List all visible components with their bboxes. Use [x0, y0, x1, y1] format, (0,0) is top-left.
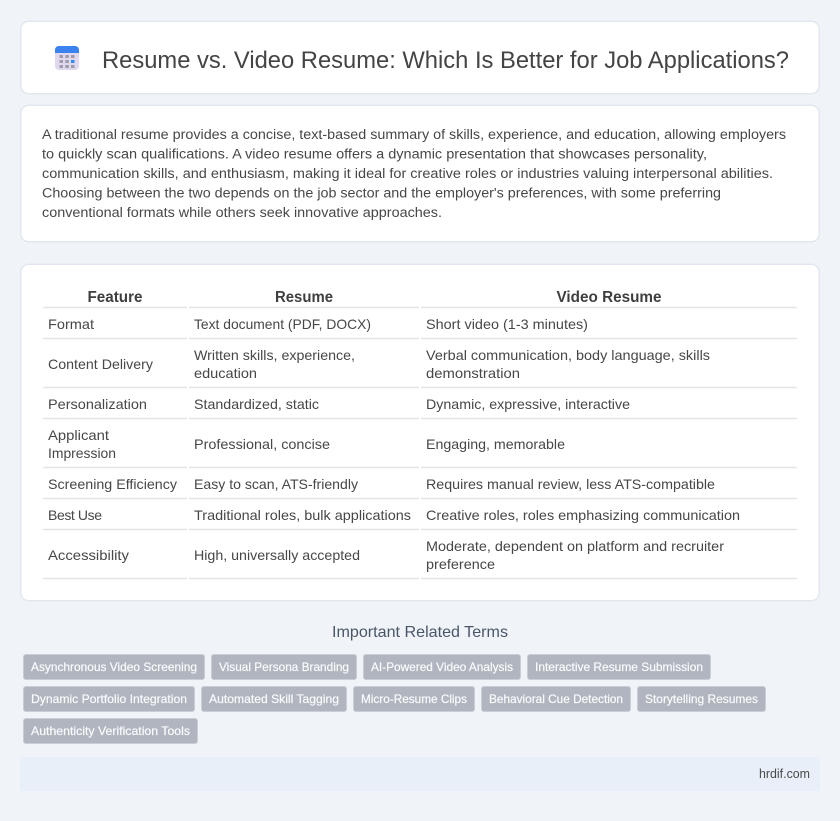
- row: personalization: Personalization: [48, 396, 147, 412]
- footer: hrdif.com: [759, 766, 810, 781]
- table header row: Resume: [275, 289, 333, 306]
- tag: [202, 686, 346, 712]
- tag: Asynchronous Video Screening: [31, 660, 197, 674]
- row: format: Format: [48, 316, 94, 332]
- row: content delivery: Content Delivery: [48, 356, 153, 372]
- text block: introduction paragraph: communication skills, and enthusiasm, making it ideal for creative roles or industries valuing interpersonal abilities.: [42, 166, 773, 182]
- row: best use: Traditional roles, bulk applications: [194, 507, 411, 523]
- row: best use: Creative roles, roles emphasizing communication: [426, 507, 740, 523]
- table header row: Feature: [88, 289, 143, 306]
- row: applicant impression: Engaging, memorable: [426, 436, 565, 452]
- tag: [24, 718, 198, 744]
- row: format: Text document (PDF, DOCX): [194, 316, 371, 332]
- panel: header: [21, 21, 819, 94]
- row: content delivery: demonstration: [426, 365, 520, 381]
- tag: [354, 686, 474, 712]
- text block: introduction paragraph: to quickly scan qualifications. A video resume offers a dynamic presentation that showcases personality,: [42, 146, 707, 162]
- row: accessibility: High, universally accepted: [194, 547, 360, 563]
- panel: introduction: [21, 105, 819, 242]
- tag: Authenticity Verification Tools: [31, 724, 190, 738]
- panel: comparison table: [21, 264, 819, 601]
- tag: Storytelling Resumes: [645, 692, 758, 706]
- row: best use: Best Use: [48, 507, 102, 523]
- row: screening efficiency: [48, 476, 715, 492]
- heading: important related terms: Important Related Terms: [332, 624, 508, 641]
- row: applicant impression: Professional, concise: [194, 436, 330, 452]
- tag: Dynamic Portfolio Integration: [31, 692, 187, 706]
- tag: [212, 654, 356, 680]
- row: screening efficiency: Requires manual review, less ATS-compatible: [426, 476, 715, 492]
- row: best use: [48, 507, 740, 523]
- row: content delivery: [48, 347, 710, 381]
- tag: Interactive Resume Submission: [535, 660, 703, 674]
- text block: introduction paragraph: conventional formats while others seek innovative approaches.: [42, 205, 442, 221]
- table header row: [88, 289, 662, 306]
- row: content delivery: education: [194, 365, 257, 381]
- table header row: Video Resume: [556, 289, 662, 306]
- tag: Behavioral Cue Detection: [489, 692, 623, 706]
- row: screening efficiency: Screening Efficiency: [48, 476, 177, 492]
- tag group: related terms: [24, 654, 766, 744]
- row: personalization: Dynamic, expressive, interactive: [426, 396, 630, 412]
- row: accessibility: Moderate, dependent on platform and recruiter: [426, 538, 724, 554]
- tag: [482, 686, 630, 712]
- row: accessibility: [48, 538, 724, 572]
- text block: introduction paragraph: A traditional resume provides a concise, text-based summary of skills, experience, and education, allowing employers: [42, 127, 786, 143]
- tag: Automated Skill Tagging: [209, 692, 339, 706]
- tag: [638, 686, 766, 712]
- footer: [20, 757, 820, 791]
- tag: [528, 654, 710, 680]
- row: applicant impression: [48, 427, 565, 461]
- row: accessibility: preference: [426, 556, 495, 572]
- row: personalization: Standardized, static: [194, 396, 319, 412]
- row: format: Short video (1-3 minutes): [426, 316, 588, 332]
- tag: [24, 686, 194, 712]
- tag: Visual Persona Branding: [219, 660, 349, 674]
- row: content delivery: Verbal communication, body language, skills: [426, 347, 710, 363]
- tag: [364, 654, 520, 680]
- row: applicant impression: Impression: [48, 445, 116, 461]
- row: personalization: [48, 396, 630, 412]
- row: screening efficiency: Easy to scan, ATS-friendly: [194, 476, 358, 492]
- row: format: [48, 316, 588, 332]
- tag: Micro-Resume Clips: [361, 692, 467, 706]
- row: content delivery: Written skills, experience,: [194, 347, 355, 363]
- title: Resume vs. Video Resume: Which Is Better for Job Applications?: [102, 47, 789, 74]
- tag: AI-Powered Video Analysis: [371, 660, 513, 674]
- row: accessibility: Accessibility: [48, 547, 129, 563]
- tag: [24, 654, 204, 680]
- row: applicant impression: Applicant: [48, 427, 109, 443]
- text block: introduction paragraph: Choosing between the two depends on the job sector and the employer's preferences, with some preferring: [42, 186, 721, 202]
- text block: introduction paragraph: [42, 127, 786, 221]
- icon: calendar: [55, 46, 79, 70]
